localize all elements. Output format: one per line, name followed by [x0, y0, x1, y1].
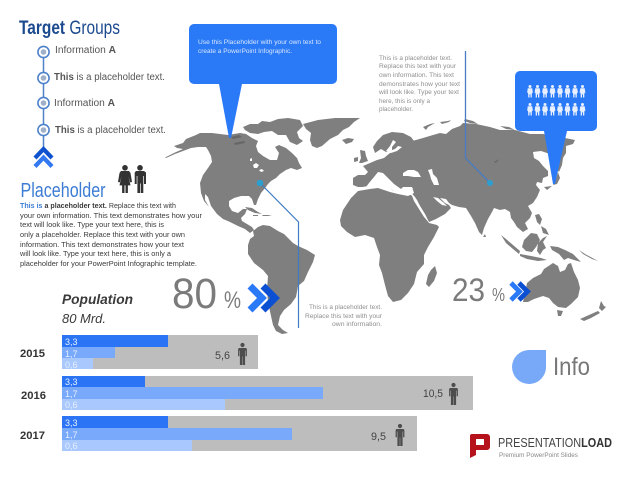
bar chart: 2016: 3,3	[65, 377, 78, 387]
callout text: create a PowerPoint Infographic.	[198, 48, 292, 55]
stat: 23 percent	[452, 272, 505, 308]
Hudson islands	[231, 135, 245, 145]
year label: 2017	[20, 430, 45, 442]
heading: Target Groups: Target Groups	[19, 18, 120, 39]
label 3: Information A	[54, 98, 115, 109]
Red Sea	[411, 193, 428, 221]
timeline node 3	[38, 97, 49, 109]
New Zealand	[580, 301, 606, 321]
Australia	[523, 263, 580, 308]
world map	[165, 118, 606, 334]
text block: top right: here, this is only a	[379, 98, 430, 105]
Iceland	[342, 138, 354, 144]
Great Lakes	[250, 158, 264, 172]
icon: person	[449, 383, 458, 405]
South America	[248, 225, 315, 334]
connector line: Asia	[466, 51, 493, 186]
stat: 23 percent: 23	[452, 272, 485, 308]
total value: 5,6	[215, 350, 230, 362]
callout: people bubble	[515, 71, 597, 184]
Baltic	[386, 140, 402, 153]
Madagascar	[426, 266, 437, 287]
icon: drop	[512, 350, 546, 384]
timeline node 2	[38, 72, 49, 84]
bar chart: 2015	[20, 335, 258, 370]
text block: bottom centre: This is a placeholder text.	[309, 304, 382, 311]
connector line: North America	[257, 180, 298, 328]
Sri Lanka	[483, 234, 486, 237]
year label: 2016	[21, 390, 46, 402]
callout: placeholder bubble	[189, 24, 337, 138]
bar chart: 2017	[20, 416, 417, 451]
callout text: Use this Placeholder with your own text to	[198, 39, 321, 46]
label 4: This is a placeholder text.	[55, 125, 166, 136]
woman	[118, 165, 132, 193]
Caspian Sea	[428, 169, 439, 185]
info badge	[512, 350, 590, 384]
Mediterranean	[357, 180, 414, 196]
stat: 23 percent: %	[492, 285, 505, 305]
text block: placeholder body: information. This text demonstrates how your text	[20, 240, 184, 249]
Russian arctic islands	[423, 119, 515, 130]
Caribbean	[245, 207, 272, 216]
year label: 2015	[20, 348, 45, 360]
text block: top right: demonstrates how your text	[379, 81, 460, 88]
text block: bottom centre: Replace this text with your	[305, 313, 383, 320]
label 2: This is a placeholder text.	[54, 72, 165, 83]
population heading: Population	[62, 291, 133, 307]
logo mark	[470, 434, 490, 458]
North America	[165, 133, 302, 233]
heading: Placeholder: Placeholder	[20, 180, 106, 202]
text block: placeholder body	[19, 201, 203, 268]
text block: bottom centre: own information.	[332, 321, 382, 328]
icon: double chevron right small	[511, 283, 528, 300]
text block: top right: Replace this text with your	[379, 63, 457, 70]
Eurasia	[353, 123, 575, 235]
text block: bottom centre	[305, 304, 383, 328]
Black Sea	[403, 170, 421, 177]
stat: 80 percent: %	[224, 287, 241, 314]
bar chart: 2016: 1,7	[65, 389, 78, 399]
stat: 80 percent	[172, 270, 241, 318]
people icons	[527, 85, 585, 116]
text block: top right	[378, 55, 460, 113]
Tasmania	[557, 310, 563, 316]
Africa	[340, 185, 439, 302]
Greenland	[303, 118, 360, 148]
population heading	[62, 291, 133, 326]
stat: 80 percent: 80	[172, 270, 217, 318]
white seas	[250, 140, 499, 221]
bar chart: 2016: 0,6	[65, 400, 78, 410]
callout text	[198, 39, 321, 55]
Persian Gulf	[433, 197, 447, 206]
Arctic islands	[243, 118, 303, 145]
logo: PresentationLoad	[470, 434, 612, 459]
label 1: Information A	[55, 45, 116, 56]
text block: top right: will look like. Type your text	[378, 89, 459, 96]
icon: woman and man	[118, 165, 146, 193]
Southeast Asia islands	[501, 214, 598, 262]
timeline node 4	[38, 124, 49, 136]
text block: top right: This is a placeholder text.	[379, 55, 452, 62]
bar chart: 2015: 0,6	[65, 360, 78, 370]
total value: 10,5	[423, 388, 443, 400]
UK and Ireland	[354, 150, 368, 163]
logo wordmark: PRESENTATIONLOAD	[498, 435, 612, 450]
bar chart: 2017: 3,3	[65, 418, 78, 428]
text block: placeholder body: This is a placeholder text. Replace this text with	[20, 201, 176, 210]
timeline list	[35, 45, 166, 166]
total value: 9,5	[371, 431, 386, 443]
Lake Baikal	[494, 159, 499, 163]
text block: placeholder body: your own information. This text demonstrates how your	[20, 211, 203, 220]
bar chart: 2017: 0,6	[65, 441, 78, 451]
bar chart: 2016	[21, 376, 473, 410]
icon: person	[238, 343, 247, 365]
man	[135, 165, 146, 193]
text block: placeholder body: text will look like. Type your text here, this is	[20, 220, 164, 229]
timeline node 1	[38, 46, 49, 58]
text block: placeholder body: will look like. Type your text here, this is only a	[19, 249, 172, 258]
logo tagline: Premium PowerPoint Slides	[499, 452, 579, 459]
info label: Info	[553, 353, 590, 381]
text block: placeholder body: placeholder for your PowerPoint Infographic template.	[20, 259, 197, 268]
icon: person	[396, 424, 404, 446]
text block: top right: placeholder.	[379, 106, 413, 113]
bar chart: 2017: 1,7	[65, 430, 78, 440]
Japan	[533, 172, 560, 195]
text block: placeholder body: only a placeholder. Replace this text with your own	[20, 230, 185, 239]
icon: double chevron up	[35, 149, 52, 166]
population value: 80 Mrd.	[62, 311, 106, 326]
bar chart: 2015: 3,3	[65, 337, 78, 347]
icon: double chevron right large	[250, 286, 275, 310]
bar chart: 2015: 1,7	[65, 349, 78, 359]
text block: top right: own information. This text	[379, 72, 454, 79]
